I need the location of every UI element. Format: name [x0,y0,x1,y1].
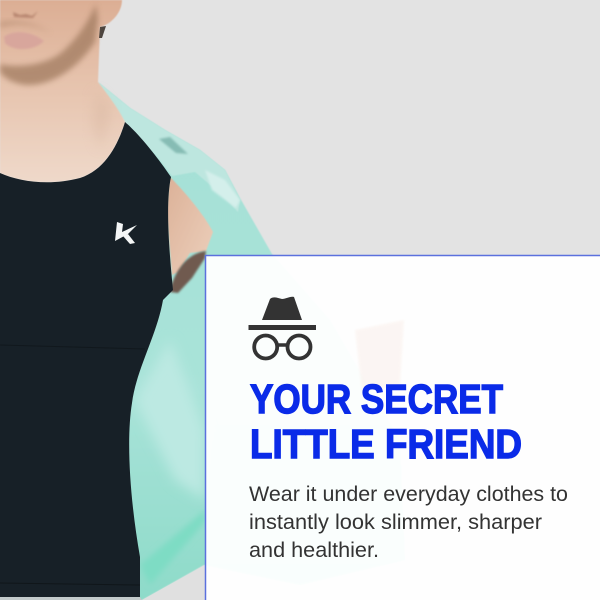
ear shadow [99,26,106,38]
nose shadow [13,11,38,18]
heading: YOUR SECRET [250,376,503,422]
tank waist seam [0,345,145,349]
black tank top [0,122,173,597]
beard [0,4,98,85]
heading: LITTLE FRIEND [250,421,522,467]
tank hem [0,583,140,585]
body text [249,482,568,562]
moustache [0,21,52,34]
faded hand [355,320,404,392]
heading [250,376,522,467]
icon: incognito hat and glasses [248,297,316,358]
model photo [0,0,405,600]
armpit shadow [170,251,206,293]
panel [206,256,600,600]
neck shadow [92,90,112,150]
lips [4,32,44,49]
body text: instantly look slimmer, sharper [249,510,542,534]
body text: and healthier. [249,538,379,562]
open shirt [98,82,405,600]
arm [167,177,213,275]
pants [0,597,142,600]
skin [0,0,125,182]
body text: Wear it under everyday clothes to [249,482,568,506]
logo [115,222,137,244]
